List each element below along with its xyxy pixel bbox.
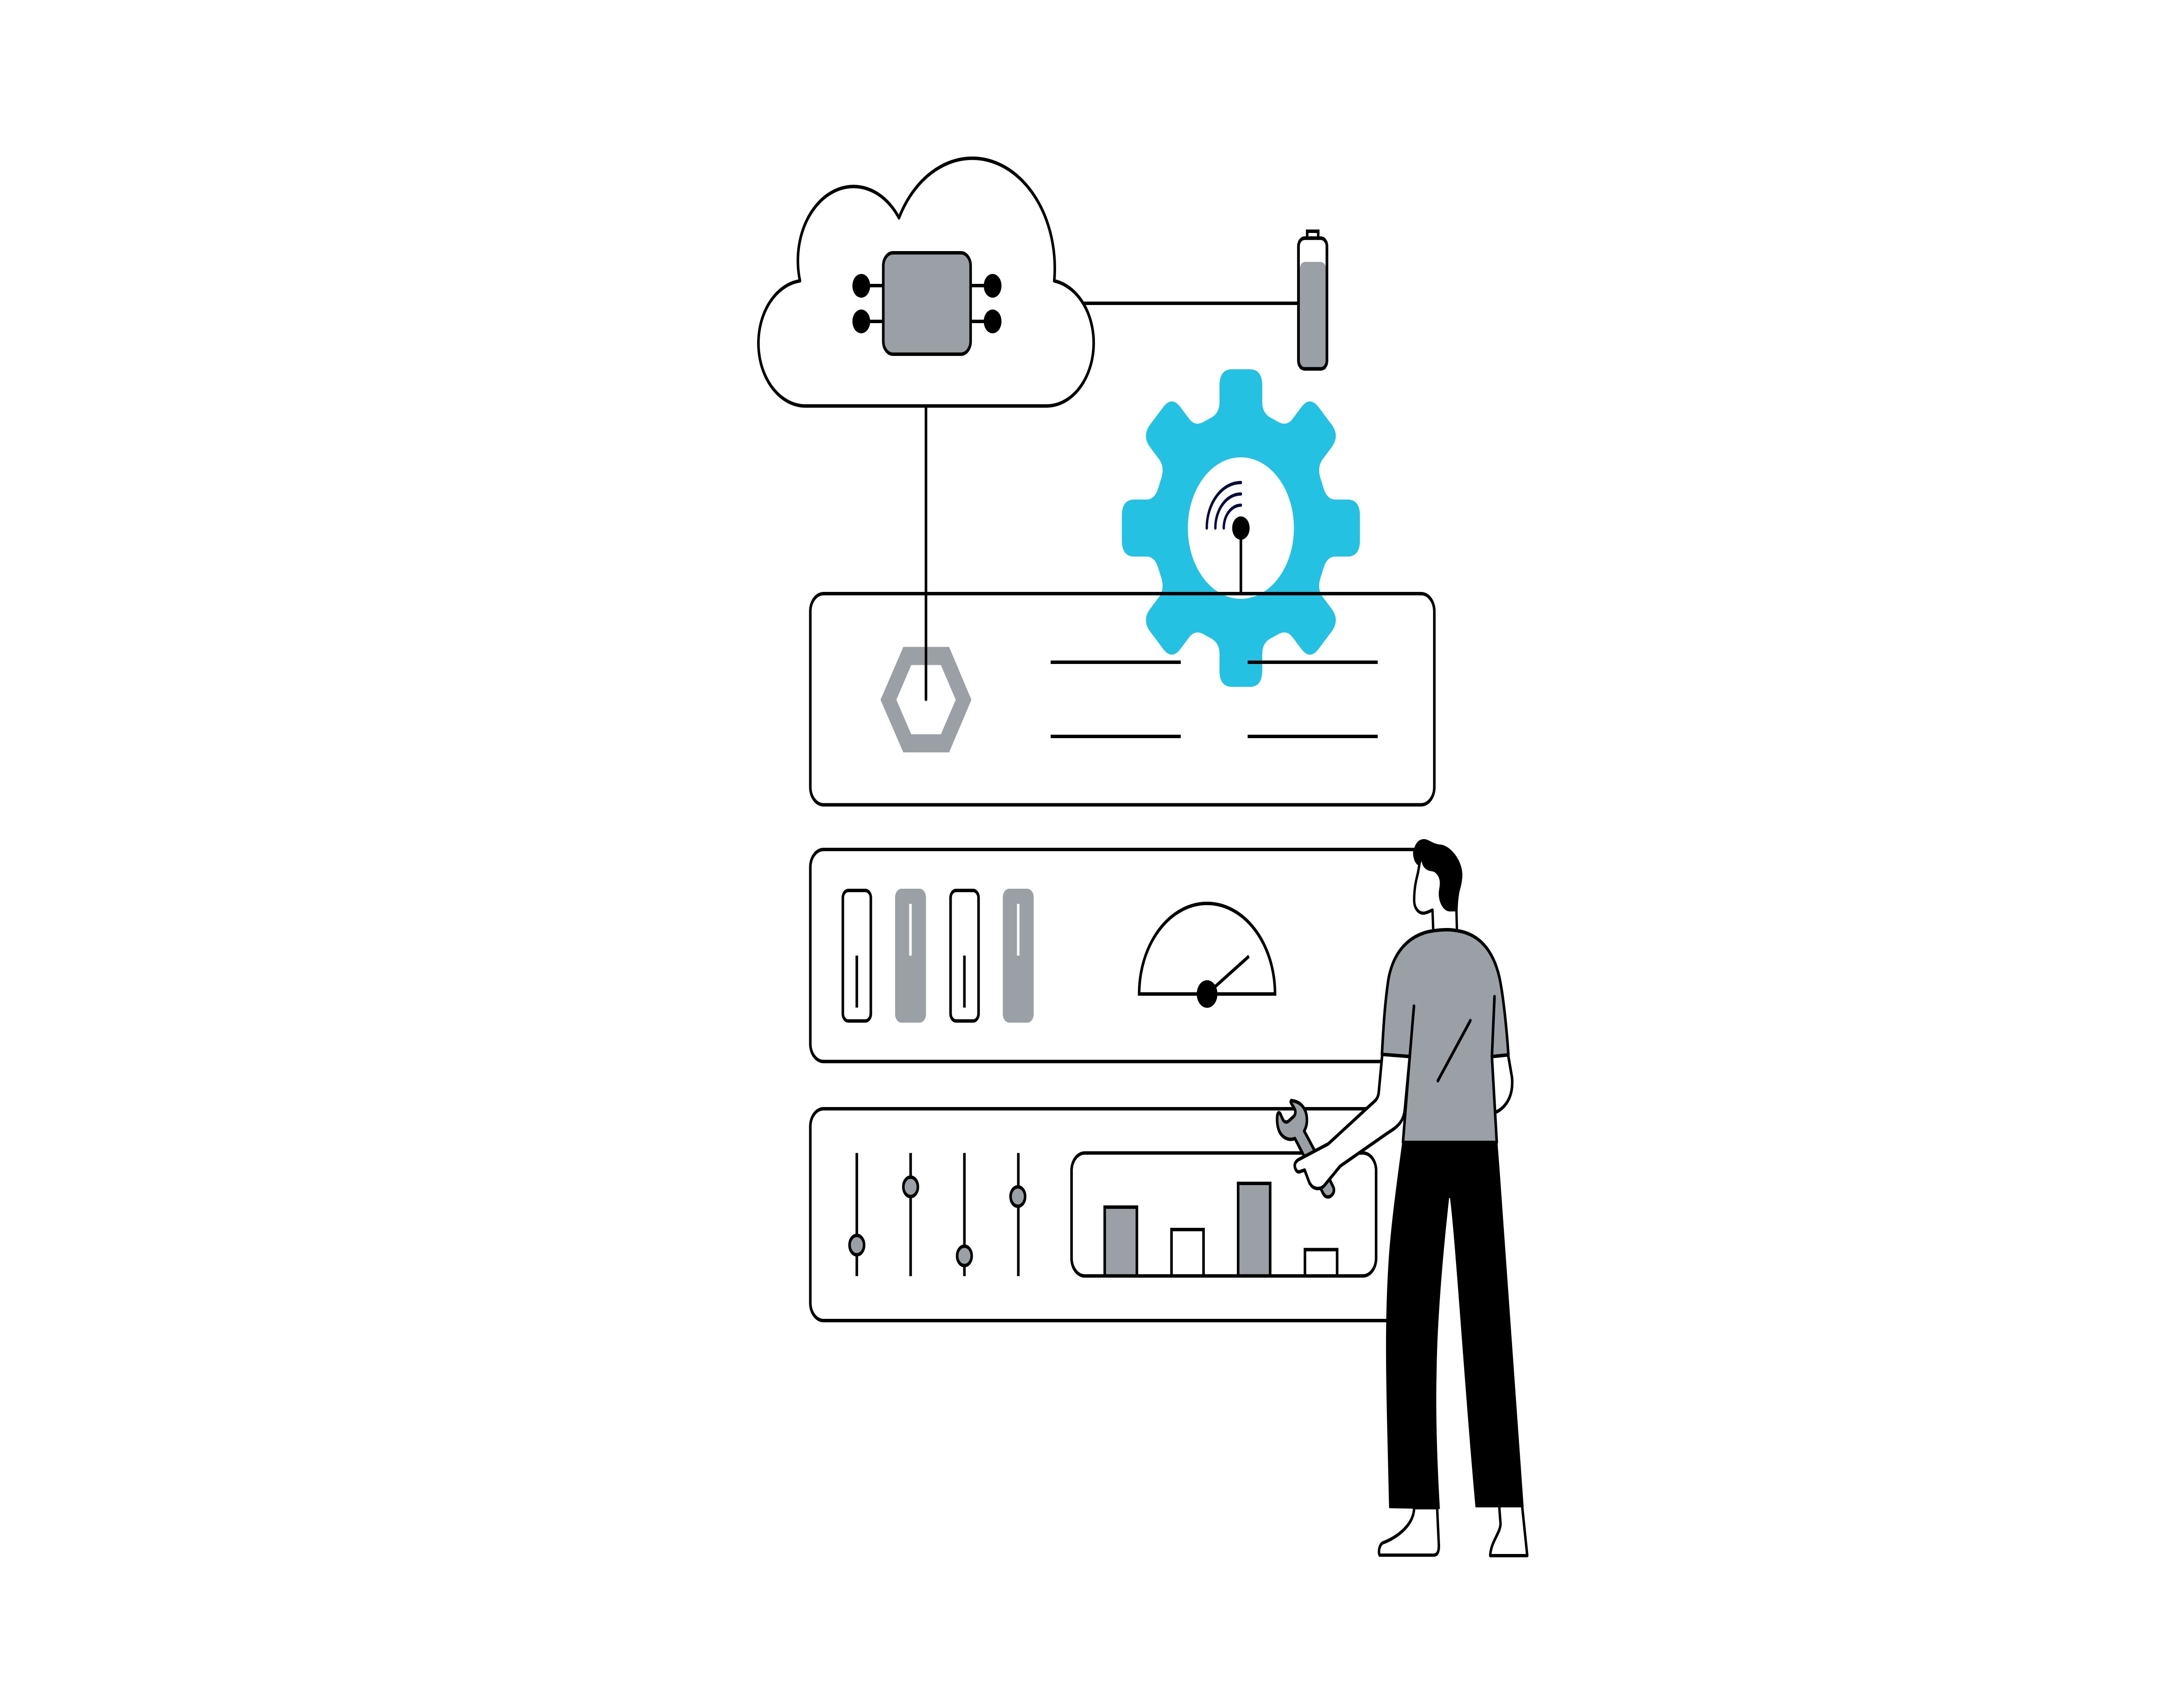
- slider 1: [849, 1153, 864, 1276]
- cloud outline: [758, 158, 1094, 406]
- gear body: [1122, 369, 1360, 687]
- toggle 2: [895, 889, 926, 1022]
- back arm: [1492, 1055, 1512, 1112]
- feet: [1379, 1505, 1527, 1556]
- connector: cloud to battery: [1082, 302, 1299, 305]
- panel frame: [810, 849, 1434, 1061]
- chip: [883, 253, 971, 354]
- toggle 1: [843, 890, 871, 1021]
- shirt folds: [1410, 997, 1494, 1081]
- icon: battery: [1299, 231, 1327, 369]
- toggle 3: [950, 890, 978, 1021]
- placeholder text lines: [1051, 662, 1378, 736]
- connector: cloud to hexagon: [924, 406, 928, 699]
- slider 3: [957, 1153, 972, 1276]
- person with wrench: [1277, 839, 1527, 1556]
- panel frame: [810, 1109, 1434, 1321]
- slider 2: [903, 1153, 918, 1276]
- front arm and hand: [1295, 1054, 1410, 1189]
- wrench: [1277, 1101, 1334, 1197]
- chip pin dots: [852, 274, 1002, 333]
- gear centre hole: [1188, 457, 1294, 599]
- gauge: [1139, 903, 1275, 1008]
- bar chart: [1072, 1153, 1376, 1276]
- panel: top status: [810, 594, 1434, 805]
- signal waves: [1207, 482, 1241, 528]
- panel: toggles and gauge: [810, 849, 1434, 1061]
- panel frame: [810, 594, 1434, 805]
- battery cap: [1307, 231, 1318, 238]
- battery charge: [1300, 262, 1326, 369]
- chip pins: [861, 286, 993, 321]
- antenna: [1232, 516, 1250, 594]
- head and neck: [1413, 839, 1462, 933]
- trousers: [1387, 1142, 1523, 1508]
- shirt: [1382, 930, 1509, 1142]
- battery outline: [1299, 238, 1327, 369]
- toggle 4: [1003, 889, 1034, 1022]
- icon: hexagon: [880, 647, 972, 752]
- icon: blue gear with signal: [1122, 369, 1360, 687]
- panel: sliders and bar chart: [810, 1109, 1434, 1321]
- icon: cloud with chip: [758, 158, 1094, 406]
- slider 4: [1011, 1153, 1025, 1276]
